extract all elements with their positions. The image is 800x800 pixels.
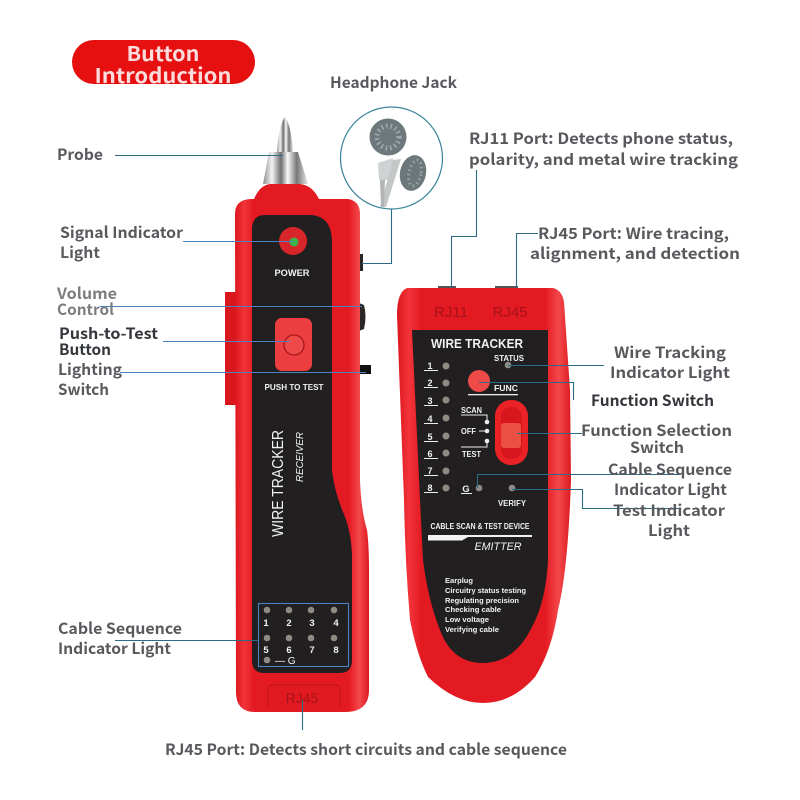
FUNC button: FUNC bbox=[494, 383, 518, 393]
cable sequence LED panel: 8 bbox=[333, 645, 339, 656]
PUSH TO TEST label: PUSH TO TEST bbox=[264, 382, 324, 392]
label: Signal Indicator Light bbox=[60, 221, 183, 263]
label: Cable Sequence Indicator Light right bbox=[608, 458, 732, 500]
label: Volume Control bbox=[56, 282, 117, 320]
cable sequence LED panel: 1 bbox=[263, 618, 269, 629]
white bar bbox=[428, 535, 532, 540]
label: Volume Control: Volume bbox=[56, 282, 117, 304]
label: Cable Sequence Indicator Light right: Cable Sequence bbox=[608, 458, 732, 480]
cable sequence LED panel: — G bbox=[275, 656, 296, 667]
label: RJ45 Port bbox=[530, 222, 740, 264]
label: Lighting Switch: Switch bbox=[58, 378, 109, 400]
label: Wire Tracking Indicator Light bbox=[610, 341, 730, 383]
function list: Checking cable bbox=[445, 605, 501, 614]
RJ45 port label: RJ45 bbox=[492, 304, 528, 321]
receiver body bbox=[235, 184, 369, 712]
WIRE TRACKER heading: WIRE TRACKER bbox=[431, 337, 523, 351]
RJ45 port moulding: RJ45 bbox=[286, 690, 319, 706]
title pill: Button Introduction: Introduction bbox=[94, 59, 232, 89]
cable sequence LED panel: 6 bbox=[286, 645, 292, 656]
label: Push-to-Test Button: Button bbox=[59, 338, 111, 360]
SCAN OFF TEST selector legend: SCAN bbox=[461, 406, 482, 415]
numbered LEDs: 3 bbox=[427, 396, 433, 406]
title pill: Button Introduction bbox=[72, 37, 255, 89]
cable sequence LED panel: 2 bbox=[286, 618, 292, 629]
label: RJ45 Port: alignment, and detection bbox=[530, 242, 740, 264]
label: RJ45 bottom: RJ45 Port: Detects short circuits and cable sequence bbox=[165, 738, 567, 760]
label: Function Switch: Function Switch bbox=[591, 389, 714, 411]
lighting switch bbox=[360, 365, 371, 374]
emitter black face bbox=[412, 330, 548, 663]
label: RJ11 Port: RJ11 Port: Detects phone status, bbox=[469, 127, 733, 149]
function list: Regulating precision bbox=[445, 596, 519, 605]
WIRE TRACKER vertical text: WIRE TRACKER bbox=[270, 430, 287, 537]
function list: Low voltage bbox=[445, 615, 489, 624]
G LED: G bbox=[462, 484, 470, 495]
label: Probe: Probe bbox=[57, 143, 103, 165]
volume wheel bbox=[359, 303, 366, 331]
label: Signal Indicator Light: Signal Indicator bbox=[60, 221, 183, 243]
label: Cable Sequence Indicator Light left: Indicator Light bbox=[58, 637, 171, 659]
cable sequence LED panel: 7 bbox=[309, 645, 315, 656]
label: Function Selection Switch: Function Selection bbox=[581, 419, 732, 441]
label: RJ11 Port bbox=[469, 127, 738, 170]
SCAN OFF TEST selector legend bbox=[461, 406, 489, 459]
function list: Earplug bbox=[445, 576, 473, 585]
label: Volume Control: Control bbox=[57, 298, 114, 320]
numbered LEDs: 8 bbox=[427, 483, 433, 493]
emitter device bbox=[397, 286, 571, 703]
title pill: Button Introduction: Button bbox=[126, 37, 200, 67]
numbered LEDs: 4 bbox=[427, 414, 433, 424]
function list bbox=[445, 576, 526, 634]
function selection slider bbox=[495, 400, 528, 465]
status LED: STATUS bbox=[494, 354, 525, 363]
label: Cable Sequence Indicator Light left bbox=[58, 617, 182, 659]
function list: Verifying cable bbox=[445, 625, 499, 634]
status LED bbox=[494, 354, 525, 368]
label: Test Indicator Light: Test Indicator bbox=[613, 499, 725, 521]
icon: headphone jack earbuds in circle bbox=[340, 107, 442, 209]
RJ11 port label: RJ11 bbox=[434, 304, 468, 321]
label: Cable Sequence Indicator Light left: Cable Sequence bbox=[58, 617, 182, 639]
SCAN OFF TEST selector legend: TEST bbox=[462, 450, 481, 459]
power LED bbox=[279, 227, 307, 255]
jack bump bbox=[359, 254, 363, 271]
CABLE SCAN heading: CABLE SCAN & TEST DEVICE bbox=[430, 522, 530, 531]
numbered LEDs bbox=[424, 361, 450, 493]
FUNC button bbox=[468, 370, 518, 395]
probe tip bbox=[263, 117, 308, 184]
label: Wire Tracking Indicator Light: Indicator Light bbox=[610, 361, 730, 383]
label: RJ45 Port: RJ45 Port: Wire tracing, bbox=[538, 222, 729, 244]
VERIFY LED: VERIFY bbox=[498, 499, 527, 508]
label: RJ11 Port: polarity, and metal wire tracking bbox=[469, 148, 738, 170]
label: Wire Tracking Indicator Light: Wire Tracking bbox=[614, 341, 726, 363]
label: Function Selection Switch: Switch bbox=[630, 436, 684, 458]
receiver black face bbox=[252, 215, 352, 673]
numbered LEDs: 6 bbox=[427, 449, 433, 459]
label: Lighting Switch bbox=[58, 358, 122, 400]
numbered LEDs: 7 bbox=[427, 466, 433, 476]
cable sequence LED panel: 4 bbox=[333, 618, 339, 629]
cable sequence LED panel: 3 bbox=[309, 618, 315, 629]
cable sequence LED panel: 5 bbox=[263, 645, 269, 656]
top ports bbox=[438, 286, 456, 288]
POWER label: POWER bbox=[274, 268, 310, 279]
label: Test Indicator Light: Light bbox=[648, 519, 691, 541]
side clip bbox=[225, 292, 236, 405]
label: Headphone Jack: Headphone Jack bbox=[330, 71, 458, 93]
label: Signal Indicator Light: Light bbox=[60, 241, 100, 263]
emitter body bbox=[397, 288, 571, 703]
EMITTER label: EMITTER bbox=[474, 541, 522, 553]
VERIFY LED bbox=[498, 485, 527, 508]
receiver device bbox=[225, 117, 371, 712]
label: Push-to-Test Button: Push-to-Test bbox=[59, 322, 158, 344]
label: Test Indicator Light bbox=[613, 499, 725, 541]
label: Cable Sequence Indicator Light right: Indicator Light bbox=[614, 478, 727, 500]
RJ45 port moulding bbox=[268, 685, 340, 708]
push to test button bbox=[275, 318, 312, 371]
numbered LEDs: 2 bbox=[427, 378, 433, 388]
RECEIVER vertical text: RECEIVER bbox=[295, 432, 306, 482]
cable sequence LED panel bbox=[258, 604, 348, 667]
label: Function Selection Switch bbox=[581, 419, 732, 458]
function list: Circuitry status testing bbox=[445, 586, 526, 595]
numbered LEDs: 1 bbox=[427, 361, 433, 371]
numbered LEDs: 5 bbox=[427, 432, 433, 442]
label: Push-to-Test Button bbox=[59, 322, 158, 360]
leader lines bbox=[100, 156, 680, 730]
label: Lighting Switch: Lighting bbox=[58, 358, 122, 380]
SCAN OFF TEST selector legend: OFF bbox=[461, 427, 476, 436]
G LED bbox=[461, 484, 482, 495]
